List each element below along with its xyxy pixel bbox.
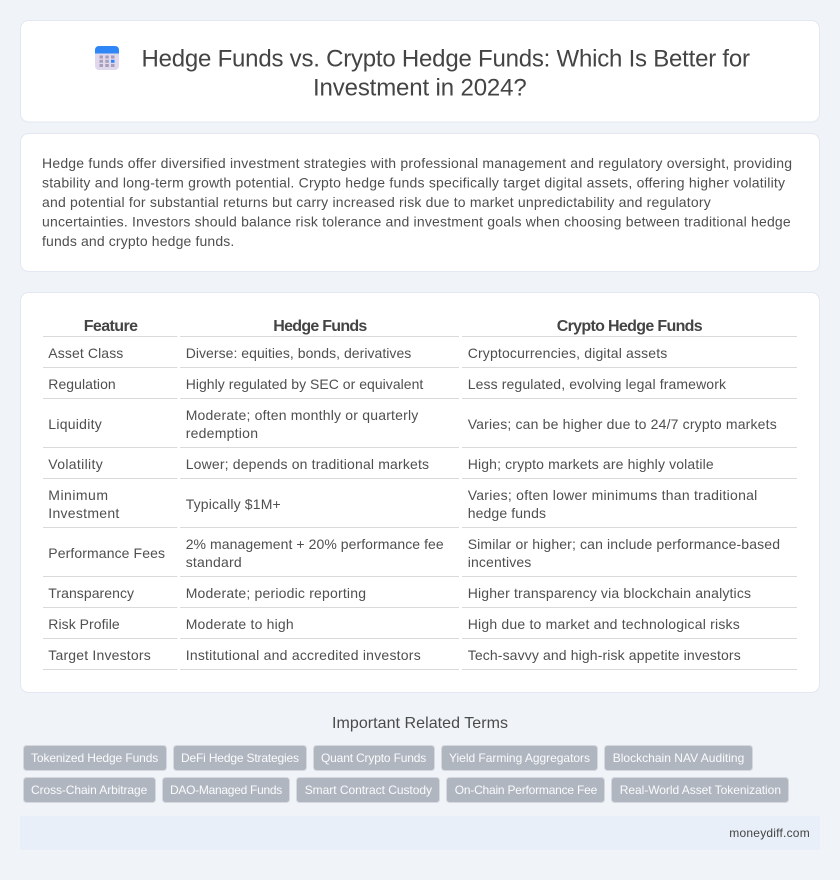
row: volatility: High; crypto markets are highly volatile: [468, 456, 714, 472]
icon: calendar: [95, 46, 119, 70]
row: asset class: Cryptocurrencies, digital assets: [468, 345, 667, 361]
row: performance fees: Similar or higher; can include performance-based: [468, 536, 780, 552]
row: volatility: [48, 456, 714, 472]
row: liquidity: redemption: [186, 425, 258, 441]
row: transparency: [48, 585, 751, 601]
panel: header: [20, 20, 820, 122]
tag: [162, 778, 290, 802]
tag: [174, 746, 306, 770]
row: asset class: Asset Class: [48, 345, 123, 361]
row: transparency: Higher transparency via blockchain analytics: [468, 585, 751, 601]
row: target investors: Target Investors: [48, 647, 151, 663]
row: liquidity: Varies; can be higher due to 24/7 crypto markets: [468, 416, 777, 432]
row: target investors: Institutional and accredited investors: [186, 647, 421, 663]
tag: [446, 778, 604, 802]
tag: [442, 746, 598, 770]
tag: [604, 746, 752, 770]
tag: Quant Crypto Funds: [321, 751, 426, 765]
text block: summary paragraph: uncertainties. Investors should balance risk tolerance and investment goals when choosing between traditional hedge: [42, 214, 791, 230]
row: liquidity: Moderate; often monthly or quarterly: [186, 407, 418, 423]
row: regulation: Less regulated, evolving legal framework: [468, 376, 727, 392]
row: target investors: Tech-savvy and high-risk appetite investors: [468, 647, 741, 663]
footer: [20, 816, 820, 850]
tag: Real-World Asset Tokenization: [620, 783, 781, 797]
row: transparency: Moderate; periodic reporting: [186, 585, 366, 601]
tag: [612, 778, 788, 802]
tag: [314, 746, 434, 770]
row: regulation: [48, 376, 727, 392]
row: minimum investment: hedge funds: [468, 505, 546, 521]
table header row: Crypto Hedge Funds: [557, 318, 703, 335]
row: volatility: Lower; depends on traditional markets: [186, 456, 429, 472]
tag: Smart Contract Custody: [305, 783, 432, 797]
tag: Cross-Chain Arbitrage: [31, 783, 148, 797]
tag: Blockchain NAV Auditing: [613, 751, 744, 765]
row: risk profile: Moderate to high: [186, 616, 294, 632]
row: asset class: Diverse: equities, bonds, derivatives: [186, 345, 411, 361]
tag: Yield Farming Aggregators: [449, 751, 590, 765]
title: Hedge Funds vs. Crypto Hedge Funds: Which Is Better for: [142, 46, 750, 72]
text block: summary paragraph: Hedge funds offer diversified investment strategies with professional management and regulatory oversight, providing: [42, 155, 792, 171]
title: [142, 46, 750, 102]
row: volatility: Volatility: [48, 456, 103, 472]
tag: [24, 778, 156, 802]
text block: summary paragraph: stability and long-term growth potential. Crypto hedge funds specifically target digital assets, offering higher volatility: [42, 174, 785, 190]
footer: moneydiff.com: [729, 826, 810, 840]
row: performance fees: Performance Fees: [48, 545, 165, 561]
row: minimum investment: [48, 487, 757, 521]
text block: summary paragraph: and potential for substantial returns but carry increased risk due to market unpredictability and regulatory: [42, 194, 711, 210]
row: risk profile: [48, 616, 740, 632]
tag: On-Chain Performance Fee: [455, 783, 598, 797]
row: transparency: Transparency: [48, 585, 134, 601]
row: performance fees: incentives: [468, 554, 531, 570]
row: performance fees: [48, 536, 780, 570]
title: Investment in 2024?: [313, 74, 527, 102]
panel: introduction: [20, 134, 820, 272]
table header row: Hedge Funds: [273, 318, 367, 335]
row: performance fees: standard: [186, 554, 242, 570]
table header row: Feature: [84, 318, 138, 335]
panel: comparison table: [20, 292, 820, 692]
table header row: [84, 318, 703, 335]
row: regulation: Highly regulated by SEC or equivalent: [186, 376, 423, 392]
tag: DAO-Managed Funds: [170, 783, 282, 797]
tag: [296, 778, 440, 802]
row: minimum investment: Minimum: [48, 487, 108, 503]
tag: DeFi Hedge Strategies: [181, 751, 299, 765]
row: regulation: Regulation: [48, 376, 116, 392]
row: risk profile: High due to market and technological risks: [468, 616, 740, 632]
text block: summary paragraph: [42, 155, 792, 249]
row: minimum investment: Investment: [48, 505, 119, 521]
row: minimum investment: Typically $1M+: [186, 496, 281, 512]
heading: related terms: Important Related Terms: [332, 715, 508, 732]
row: risk profile: Risk Profile: [48, 616, 120, 632]
row: liquidity: Liquidity: [48, 416, 102, 432]
row: target investors: [48, 647, 741, 663]
row: performance fees: 2% management + 20% performance fee: [186, 536, 444, 552]
row: asset class: [48, 345, 667, 361]
tag: [24, 746, 166, 770]
text block: summary paragraph: funds and crypto hedge funds.: [42, 233, 234, 249]
row: minimum investment: Varies; often lower minimums than traditional: [468, 487, 757, 503]
tag: Tokenized Hedge Funds: [31, 751, 158, 765]
row: liquidity: [48, 407, 777, 441]
related term tags: [24, 746, 788, 802]
